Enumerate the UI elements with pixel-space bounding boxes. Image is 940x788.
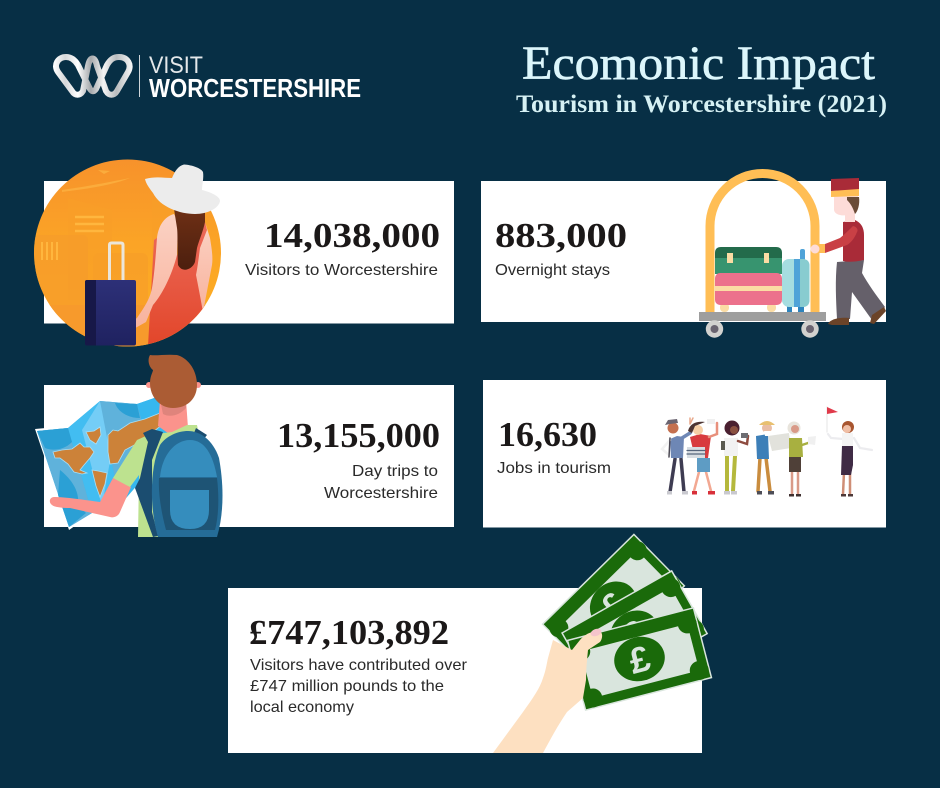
value: 883,000 <box>495 216 627 255</box>
logo word VISIT: VISIT <box>149 52 203 79</box>
subtitle: Tourism in Worcestershire (2021) <box>516 91 887 118</box>
bellhop <box>810 178 886 325</box>
icon: interlaced W mark <box>56 57 130 95</box>
illustration: bellhop and luggage trolley <box>699 174 886 338</box>
wheels <box>706 320 819 338</box>
blue case <box>782 249 810 313</box>
illustration: tour group <box>662 407 872 496</box>
label: Visitors to Worcestershire <box>245 262 438 279</box>
ears and head <box>146 355 201 408</box>
card <box>44 181 454 324</box>
banknote front <box>568 608 711 710</box>
logo: Visit Worcestershire <box>56 52 361 103</box>
tourist 4 <box>756 421 791 494</box>
neck <box>158 404 188 433</box>
banknote middle: £ <box>616 611 654 657</box>
tour guide with flag <box>827 407 872 496</box>
panel: economic contribution <box>228 534 711 753</box>
card <box>44 385 454 527</box>
suitcase handle <box>110 243 123 281</box>
continents <box>53 413 162 497</box>
banknote middle <box>562 571 708 696</box>
green t-shirt <box>113 425 200 537</box>
suitcase <box>85 280 136 346</box>
world map <box>35 394 172 530</box>
description: £747 million pounds to the <box>250 678 444 695</box>
label: Day trips to <box>352 463 438 480</box>
traveller body clipped to disc <box>136 210 212 344</box>
tourist 3 <box>721 420 748 494</box>
orange sun disc <box>34 160 221 346</box>
fingernail <box>590 627 602 638</box>
faded background scene <box>34 170 206 346</box>
illustration: traveller with suitcase <box>30 160 230 350</box>
illustration: hand holding banknotes <box>493 534 711 753</box>
green case <box>715 247 782 274</box>
banknote front: £ <box>625 637 654 682</box>
map water shading <box>37 403 140 527</box>
card <box>228 588 702 753</box>
label: Jobs in tourism <box>497 460 611 477</box>
label: Worcestershire <box>324 485 438 502</box>
value: 14,038,000 <box>264 216 440 255</box>
logo divider <box>139 55 140 97</box>
hand <box>493 631 602 753</box>
arm holding map <box>50 478 131 517</box>
panel: overnight stays <box>481 174 886 338</box>
value: 16,630 <box>498 415 597 454</box>
backpack <box>135 428 222 537</box>
logo word WORCESTERSHIRE: WORCESTERSHIRE <box>149 73 361 103</box>
tourist 5 <box>788 422 816 496</box>
label: Overnight stays <box>495 262 610 279</box>
description: Visitors have contributed over <box>250 657 468 674</box>
card <box>483 380 886 528</box>
white sun hat <box>145 164 220 214</box>
panel: visitors <box>30 160 454 350</box>
value: £747,103,892 <box>249 613 449 652</box>
trolley arch <box>710 174 815 313</box>
title: Ecomonic Impact <box>522 37 876 90</box>
panel: day trips <box>35 355 454 537</box>
pink case <box>715 273 782 312</box>
tourist 2 <box>687 419 717 494</box>
tourist 1 <box>662 418 693 494</box>
value: 13,155,000 <box>277 416 440 455</box>
panel: jobs <box>483 380 886 528</box>
banknote back: £ <box>592 584 635 627</box>
banknote back <box>542 534 685 676</box>
illustration: backpacker with map <box>35 355 222 537</box>
card <box>481 181 886 322</box>
description: local economy <box>250 699 354 716</box>
trolley base <box>699 312 826 321</box>
